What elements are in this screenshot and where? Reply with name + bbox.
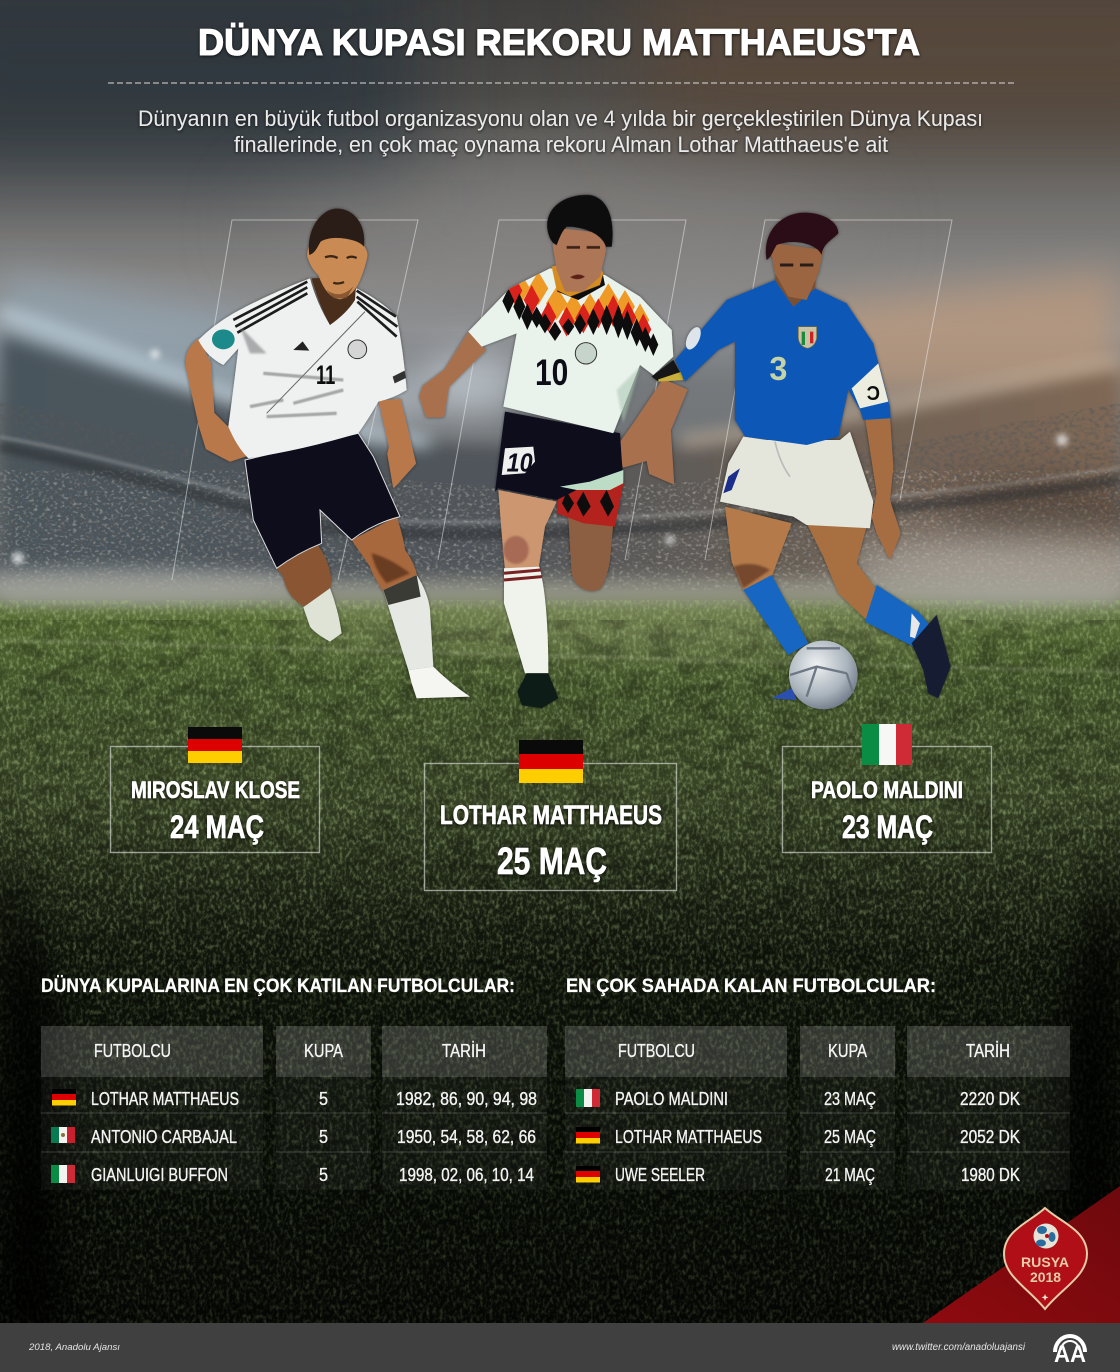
table: most World Cups: 1982, 86, 90, 94, 98 xyxy=(396,1089,537,1109)
Klose: near leg, sock and boot xyxy=(352,517,470,698)
table: most minutes: TARİH xyxy=(966,1041,1010,1061)
Matthaeus: shorts with pattern xyxy=(495,412,623,527)
Matthaeus: near leg and boot xyxy=(498,490,558,708)
table: most World Cups xyxy=(41,1026,547,1190)
player: Lothar Matthaeus xyxy=(420,195,687,708)
heading: most World Cups: DÜNYA KUPALARINA EN ÇOK KATILAN FUTBOLCULAR: xyxy=(41,976,515,997)
intro text: finallerinde, en çok maç oynama rekoru Alman Lothar Matthaeus'e ait xyxy=(234,132,888,157)
flag: Mexico xyxy=(51,1127,75,1143)
table: most minutes: 2220 DK xyxy=(960,1089,1020,1109)
table: most minutes xyxy=(565,1026,1070,1190)
flag: Italy row 3 xyxy=(51,1165,75,1183)
flag: Germany row 3 right xyxy=(576,1166,600,1182)
Matthaeus: white shirt xyxy=(468,268,683,433)
icon: Rusya 2018 badge: RUSYA xyxy=(1021,1254,1069,1270)
Maldini: blue shirt xyxy=(675,280,891,445)
Matthaeus: far leg xyxy=(568,517,613,591)
table: most minutes: 1980 DK xyxy=(961,1165,1020,1185)
Klose: arms xyxy=(186,340,415,487)
Matthaeus: shorts with pattern: 10 xyxy=(507,448,533,478)
background decoration: red corner triangle xyxy=(923,1186,1120,1323)
Klose: far leg and boot xyxy=(277,543,342,642)
Matthaeus: head and hair xyxy=(547,195,613,297)
player card: Paolo Maldini xyxy=(782,724,992,852)
table: most World Cups: TARİH xyxy=(442,1041,486,1061)
player: Paolo Maldini xyxy=(675,213,951,709)
player card: Miroslav Klose: 24 MAÇ xyxy=(170,809,264,845)
flag: Germany row 2 right xyxy=(576,1127,600,1144)
icon: Rusya 2018 badge: 2018 xyxy=(1030,1269,1061,1285)
Maldini: blue shirt: Ɔ xyxy=(867,383,880,405)
icon: Rusya 2018 badge xyxy=(1004,1208,1087,1309)
footer bar: www.twitter.com/anadoluajansi xyxy=(892,1342,1026,1353)
table: most minutes: KUPA xyxy=(828,1041,867,1061)
table: most World Cups: 5 xyxy=(319,1089,328,1109)
table: most World Cups: FUTBOLCU xyxy=(94,1041,171,1061)
table: most World Cups: ANTONIO CARBAJAL xyxy=(91,1127,237,1147)
player card: Paolo Maldini: 23 MAÇ xyxy=(842,809,933,845)
flag: Italy row 1 right xyxy=(576,1089,600,1107)
Maldini: arm xyxy=(865,417,901,560)
table: most World Cups: GIANLUIGI BUFFON xyxy=(91,1165,228,1185)
Klose: head and hair xyxy=(307,209,367,325)
table: most minutes: 23 MAÇ xyxy=(824,1089,876,1109)
player card: Lothar Matthaeus: 25 MAÇ xyxy=(497,841,607,883)
table: most minutes: 2052 DK xyxy=(960,1127,1020,1147)
Maldini: head and hair xyxy=(766,213,838,307)
table: most World Cups: KUPA xyxy=(304,1041,343,1061)
Klose: white shirt xyxy=(198,278,407,458)
Matthaeus: arms xyxy=(420,333,687,483)
player card: Lothar Matthaeus: LOTHAR MATTHAEUS xyxy=(440,800,662,830)
player: Miroslav Klose xyxy=(186,209,470,698)
title divider xyxy=(108,82,1015,84)
table: most minutes: LOTHAR MATTHAEUS xyxy=(615,1127,762,1147)
footer bar xyxy=(0,1323,1120,1372)
table: most minutes: PAOLO MALDINI xyxy=(615,1089,728,1109)
intro text xyxy=(138,106,983,157)
player card: Miroslav Klose: MIROSLAV KLOSE xyxy=(131,777,300,804)
player card: Paolo Maldini: PAOLO MALDINI xyxy=(811,777,963,804)
table: most World Cups: 5 xyxy=(319,1127,328,1147)
flag: Germany large xyxy=(519,740,583,783)
table: most minutes: FUTBOLCU xyxy=(618,1041,695,1061)
Klose: black shorts xyxy=(245,433,400,568)
Matthaeus: diamond yoke xyxy=(502,272,658,356)
Maldini: soccer ball xyxy=(772,641,858,709)
heading: most minutes: EN ÇOK SAHADA KALAN FUTBOLCULAR: xyxy=(566,976,936,997)
table: most World Cups: 1950, 54, 58, 62, 66 xyxy=(397,1127,536,1147)
flag: Italy xyxy=(862,724,912,765)
Maldini: legs and socks xyxy=(725,507,951,698)
flag: Germany row 1 xyxy=(52,1089,76,1106)
title: DÜNYA KUPASI REKORU MATTHAEUS'TA xyxy=(198,22,920,63)
table: most World Cups: 5 xyxy=(319,1165,328,1185)
player card: Miroslav Klose xyxy=(110,727,320,852)
table: most World Cups: 1998, 02, 06, 10, 14 xyxy=(399,1165,534,1185)
icon: Anadolu Agency logo: AA xyxy=(1054,1341,1086,1368)
table: most minutes: 25 MAÇ xyxy=(824,1127,876,1147)
footer bar: 2018, Anadolu Ajansı xyxy=(28,1342,120,1353)
player frame outlines xyxy=(172,220,952,580)
table: most World Cups: LOTHAR MATTHAEUS xyxy=(91,1089,239,1109)
Maldini: blue shirt: 3 xyxy=(769,351,787,388)
Maldini: white shorts xyxy=(720,432,873,528)
table: most minutes: UWE SEELER xyxy=(615,1165,705,1185)
Matthaeus: white shirt: 10 xyxy=(535,352,568,393)
player card: Lothar Matthaeus xyxy=(424,740,676,890)
Klose: white shirt: 11 xyxy=(316,360,335,390)
intro text: Dünyanın en büyük futbol organizasyonu olan ve 4 yılda bir gerçekleştirilen Dünya Kupası xyxy=(138,106,983,131)
table: most minutes: 21 MAÇ xyxy=(825,1165,875,1185)
flag: Germany xyxy=(188,727,242,763)
